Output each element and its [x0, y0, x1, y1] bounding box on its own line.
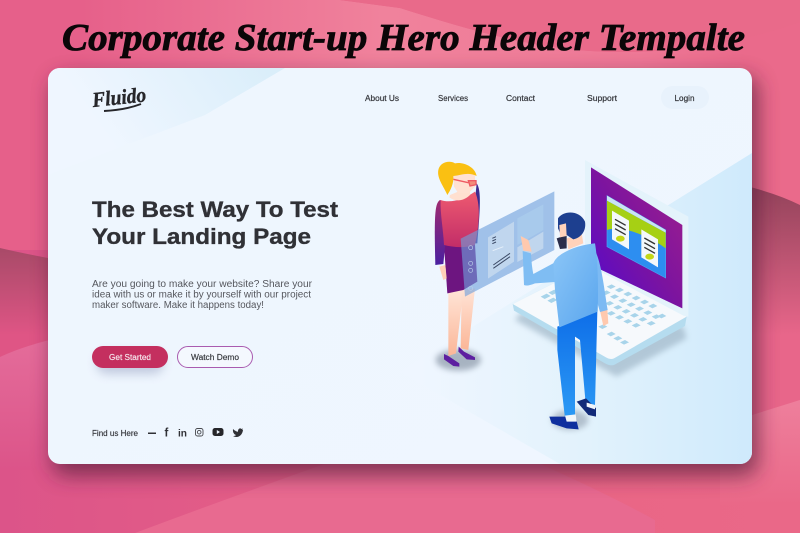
man right hand: [600, 309, 608, 326]
woman shoes: [444, 354, 459, 367]
man neck: [567, 233, 583, 249]
man: [521, 212, 608, 429]
navigation: About Us: [365, 94, 399, 103]
laptop lid: [585, 160, 688, 317]
icon: youtube: [212, 428, 224, 436]
woman skirt: [444, 245, 477, 293]
man front shoe: [549, 417, 579, 429]
man legs: [557, 312, 597, 418]
social links: [92, 428, 243, 440]
screen mock-up: [607, 196, 666, 278]
woman glasses: [453, 179, 476, 186]
paragraph: Are you going to make your website? Share your: [92, 279, 313, 290]
woman arms: [435, 200, 447, 265]
heading: The Best Way To Test: [92, 197, 339, 222]
paragraph: idea with us or make it by yourself with our project: [92, 290, 311, 300]
woman torso: [441, 192, 479, 247]
paragraph: [92, 279, 313, 311]
woman legs: [448, 290, 463, 356]
holographic panel: [461, 191, 554, 297]
navigation: Services: [438, 94, 468, 103]
navigation: Contact: [506, 94, 536, 103]
icon: facebook: f: [164, 428, 168, 440]
logo: Fluido: [90, 82, 147, 112]
woman: [435, 162, 480, 367]
shadows: [515, 313, 687, 377]
paragraph: maker software. Make it happens today!: [92, 300, 264, 311]
man head: [558, 212, 585, 239]
heading: Your Landing Page: [92, 224, 311, 249]
man hand: [521, 236, 532, 252]
login button: [661, 86, 709, 109]
illustration: [435, 160, 688, 430]
navigation: Support: [587, 94, 618, 103]
button: get started: Get Started: [109, 353, 151, 362]
button: get started: [92, 346, 168, 374]
icon: instagram: [196, 428, 203, 436]
login button: Login: [674, 94, 694, 103]
woman hair: [438, 162, 477, 195]
man back shoe: [577, 398, 596, 417]
keyboard: [541, 284, 666, 345]
woman head: [453, 173, 475, 193]
title: Corporate Start-up Hero Header Tempalte: [62, 17, 745, 59]
man arm pointing: [523, 251, 560, 286]
man right arm: [590, 245, 608, 312]
button: watch demo: [178, 346, 252, 368]
heading: [92, 197, 339, 249]
man jacket: [553, 243, 598, 327]
social links: Find us Here: [92, 429, 139, 438]
man beard: [557, 235, 567, 249]
panel: hero card: [48, 68, 752, 464]
laptop: [513, 160, 688, 365]
icon: twitter: [233, 428, 243, 437]
laptop base: [513, 265, 687, 365]
laptop screen: [591, 167, 682, 308]
icon: linkedin: in: [178, 428, 187, 440]
navigation: [365, 86, 709, 109]
button: watch demo: Watch Demo: [191, 353, 240, 362]
card shadow: [52, 76, 758, 476]
